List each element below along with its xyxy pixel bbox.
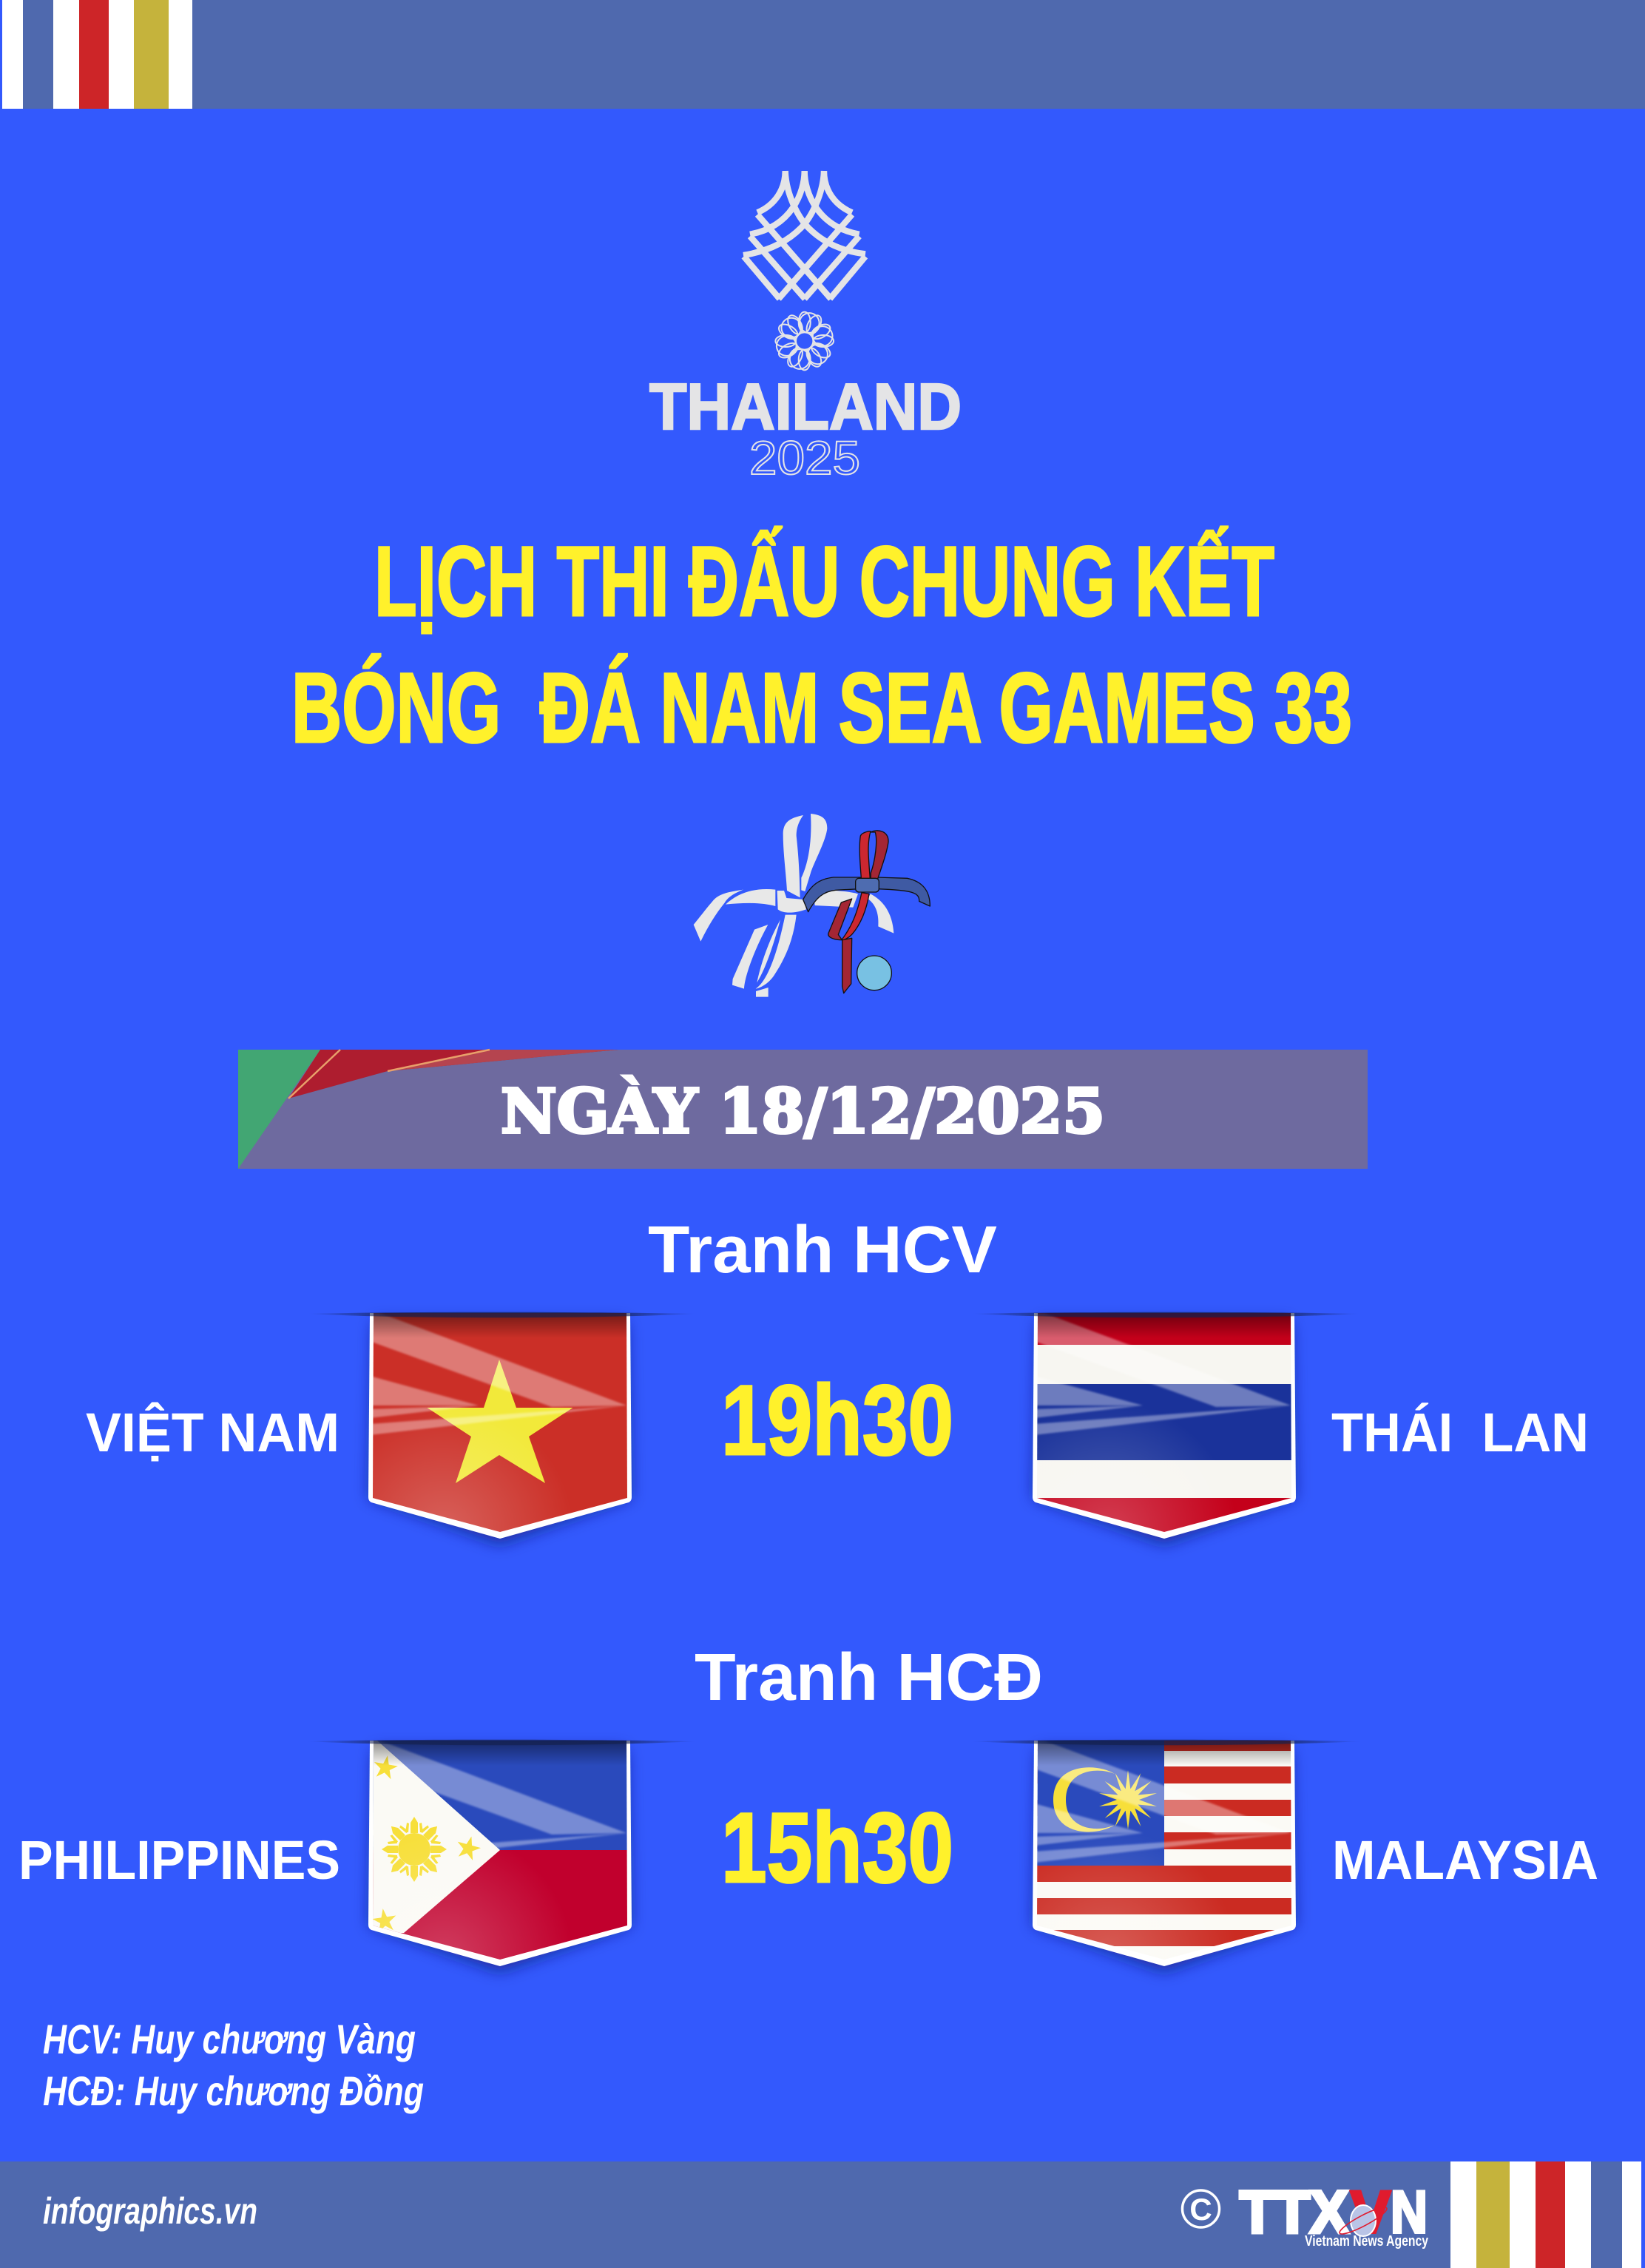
legend: HCĐ: Huy chương Đồng <box>43 2068 424 2114</box>
title: LỊCH THI ĐẤU CHUNG KẾT <box>374 526 1274 637</box>
flag ribbon: Thailand <box>971 1312 1362 1544</box>
team name: Philippines: PHILIPPINES <box>18 1829 340 1891</box>
logo: Thailand 2025 <box>649 171 962 485</box>
header band with stripes <box>0 0 1645 109</box>
white ribbon <box>694 814 894 997</box>
icon: flower <box>774 311 834 371</box>
match time: third place: 15h30 <box>721 1793 953 1903</box>
legend <box>43 2016 424 2114</box>
logo year: 2025 <box>749 431 860 485</box>
date banner <box>238 1050 1368 1169</box>
ball <box>857 956 891 990</box>
team name: Malaysia: MALAYSIA <box>1332 1829 1598 1891</box>
icon: tied ribbons and ball <box>694 814 930 997</box>
TTXVN logo: Vietnam News Agency <box>1305 2233 1429 2250</box>
team name: Viet Nam: VIỆT NAM <box>86 1402 340 1463</box>
date text: NGÀY 18/12/2025 <box>501 1076 1105 1147</box>
legend: HCV: Huy chương Vàng <box>43 2016 416 2062</box>
flag ribbon: Viet Nam <box>307 1312 697 1544</box>
copyright mark <box>1182 2190 1219 2227</box>
title <box>291 526 1352 763</box>
TTXVN logo <box>1240 2179 1429 2250</box>
TTXVN logo: V <box>1351 2179 1391 2246</box>
heading: gold medal match: Tranh HCV <box>648 1213 997 1287</box>
copyright mark: C <box>1189 2192 1212 2227</box>
TTXVN logo: N <box>1391 2179 1428 2246</box>
match time: final: 19h30 <box>721 1366 953 1476</box>
website: infographics.vn <box>43 2190 257 2232</box>
TTXVN logo: TTX <box>1240 2179 1348 2246</box>
team name: Thailand: THÁI LAN <box>1331 1402 1589 1463</box>
red and blue ribbon <box>803 831 930 993</box>
icon: roof emblem <box>743 171 865 299</box>
footer band with stripes <box>0 2161 1645 2268</box>
logo wordmark: THAILAND <box>649 370 962 443</box>
heading: bronze medal match: Tranh HCĐ <box>695 1641 1043 1715</box>
flag ribbon: Philippines <box>307 1740 697 1972</box>
flag ribbon: Malaysia <box>971 1740 1362 1971</box>
